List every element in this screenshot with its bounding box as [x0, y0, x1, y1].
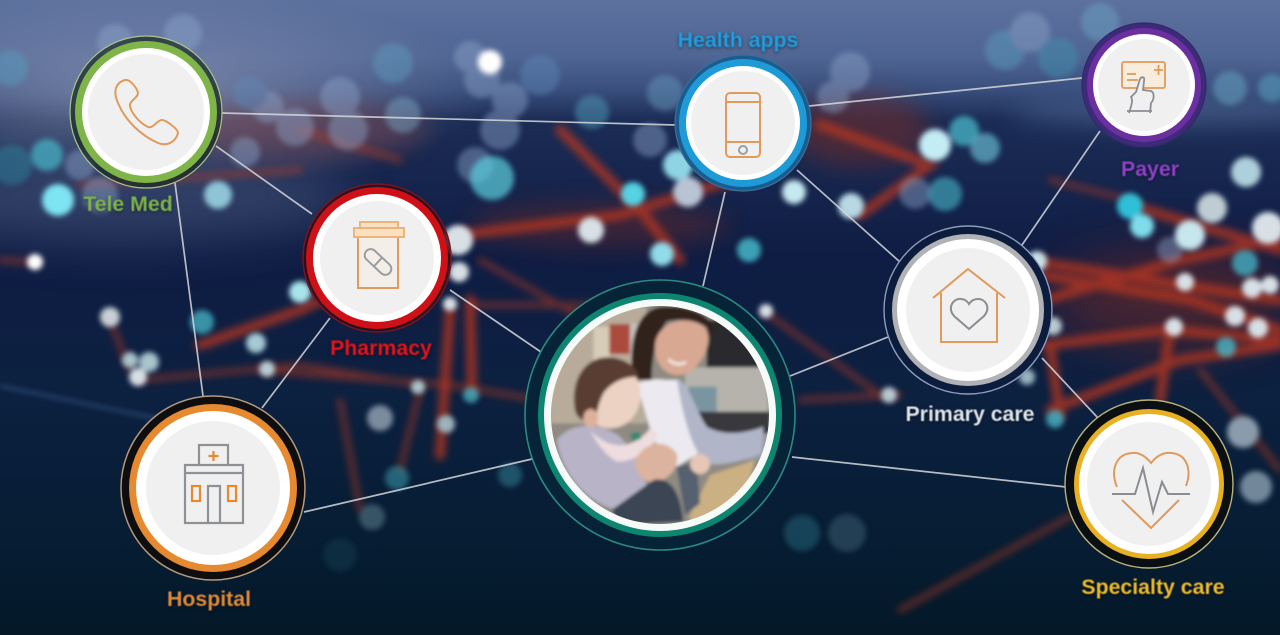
- node: Specialty care: [1065, 400, 1233, 568]
- node: Payer: [1082, 23, 1206, 147]
- label: Health apps: Health apps: [678, 28, 798, 52]
- label: Primary care: Primary care: [905, 402, 1035, 426]
- connector lines: [175, 78, 1100, 512]
- red network streaks: [0, 125, 1280, 610]
- node: Hospital: [121, 396, 305, 580]
- icon: smartphone: [726, 93, 760, 157]
- label: Payer: Payer: [1121, 157, 1179, 181]
- node: Health apps: [675, 55, 811, 191]
- photo: [551, 306, 769, 524]
- icon: house with heart: [933, 269, 1005, 342]
- mother's top and sleeve: [637, 379, 698, 467]
- room backdrop: [550, 307, 647, 423]
- label: Tele Med: Tele Med: [83, 192, 173, 216]
- label: Specialty care: Specialty care: [1081, 575, 1225, 599]
- icon: heart with pulse: [1112, 453, 1190, 528]
- icon: hospital building: [185, 445, 243, 523]
- icon: pill bottle: [354, 222, 404, 288]
- central portrait: mother and baby: [525, 280, 795, 550]
- icon: card and hand: [1122, 62, 1165, 113]
- mother's hand and jeans: [635, 444, 677, 483]
- node: Primary care: [884, 226, 1052, 394]
- icon: telephone handset: [115, 80, 178, 144]
- open book: [688, 460, 755, 522]
- node: Pharmacy: [303, 184, 451, 332]
- label: Pharmacy: Pharmacy: [330, 336, 432, 360]
- label: Hospital: Hospital: [167, 587, 251, 611]
- baby's head: [595, 374, 642, 430]
- mother's hair and face: [631, 306, 717, 380]
- baby's body: [557, 426, 648, 510]
- node: Tele Med: [70, 36, 222, 188]
